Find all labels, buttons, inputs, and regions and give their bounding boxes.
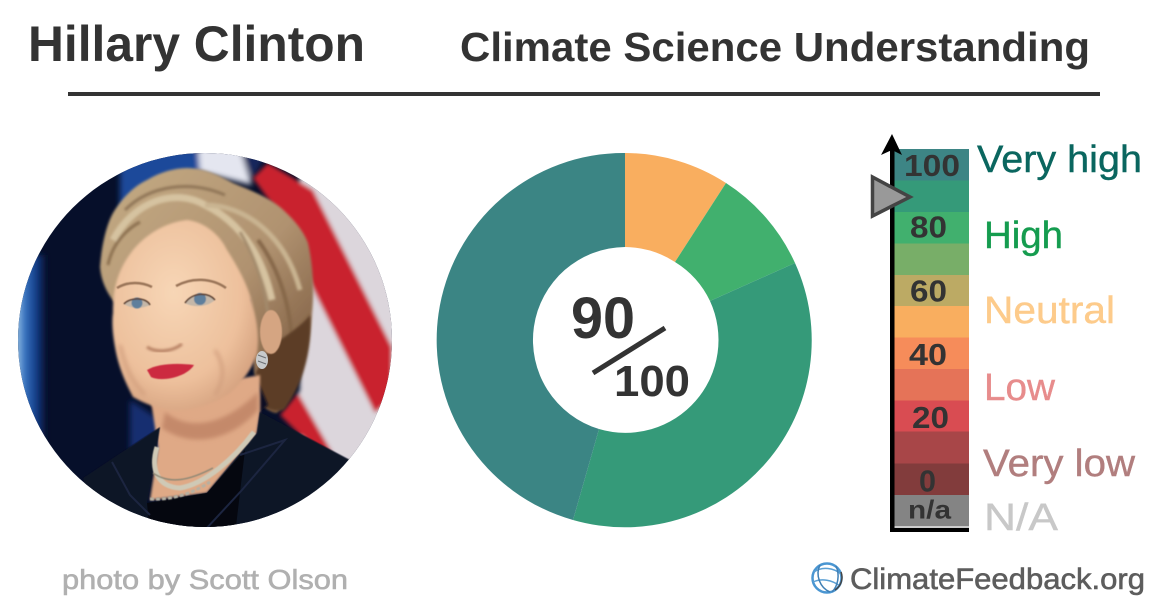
scale numbers: 60 bbox=[910, 274, 947, 308]
icon: globe logo bbox=[812, 564, 842, 592]
eyebrows bbox=[117, 280, 226, 288]
score: 90 / 100: 100 bbox=[614, 357, 690, 406]
scale labels: Neutral bbox=[984, 290, 1115, 332]
segment: orange bbox=[625, 153, 726, 262]
scale labels: N/A bbox=[984, 497, 1059, 539]
scale labels: Very low bbox=[983, 443, 1136, 485]
earring bbox=[256, 351, 268, 369]
hair bbox=[100, 168, 313, 413]
necklace bbox=[150, 432, 254, 499]
scale numbers: 0 bbox=[919, 464, 936, 498]
scale labels: Very high bbox=[977, 139, 1142, 181]
segment: green bbox=[675, 183, 795, 301]
scale labels: Low bbox=[984, 367, 1056, 409]
face bbox=[112, 220, 258, 410]
ear bbox=[260, 310, 282, 354]
donut chart bbox=[437, 153, 812, 527]
lips bbox=[147, 364, 194, 379]
axis arrow bbox=[881, 134, 969, 532]
portrait photo illustration bbox=[18, 153, 392, 527]
scale numbers: 100 bbox=[904, 148, 960, 183]
scale numbers: n/a bbox=[908, 494, 952, 524]
rating scale bbox=[872, 134, 1142, 539]
title: name: Hillary Clinton bbox=[28, 16, 365, 72]
heading: Climate Science Understanding: Climate Science Understanding bbox=[460, 24, 1090, 70]
eyes bbox=[124, 293, 215, 308]
neck bbox=[150, 375, 260, 500]
logo text: ClimateFeedback.org bbox=[850, 563, 1145, 596]
scale labels: High bbox=[984, 215, 1063, 257]
hair strands bbox=[108, 187, 300, 350]
score: 90 / 100 bbox=[571, 286, 690, 406]
score: 90 / 100: 90 bbox=[571, 286, 635, 351]
photo credit: photo by Scott Olson bbox=[62, 564, 348, 595]
segment: sea green bbox=[573, 263, 812, 527]
scale numbers: 40 bbox=[909, 337, 947, 372]
scale numbers: 80 bbox=[910, 210, 947, 244]
scale labels bbox=[977, 139, 1142, 539]
lapels bbox=[112, 440, 285, 530]
scale numbers: 20 bbox=[912, 400, 949, 435]
segment: teal bbox=[437, 153, 625, 520]
jacket bbox=[83, 412, 350, 535]
nose shadow bbox=[147, 344, 182, 351]
marker bbox=[872, 177, 910, 216]
scale numbers bbox=[904, 148, 960, 524]
